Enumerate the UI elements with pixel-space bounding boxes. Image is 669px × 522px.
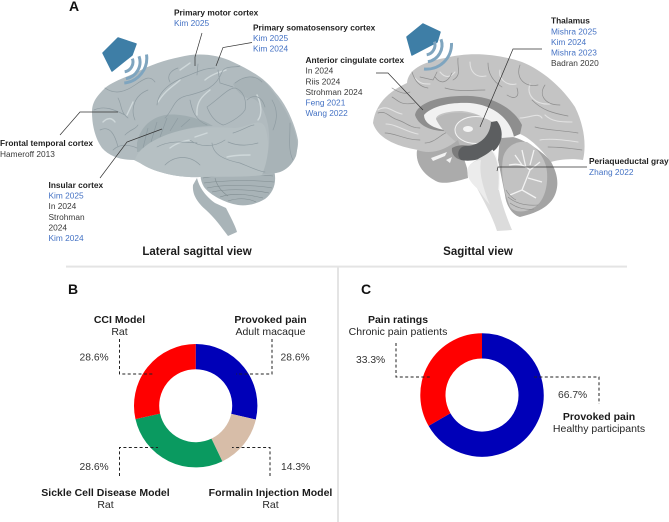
label: primary somatosensory cortex: Primary somatosensory cortex — [253, 22, 376, 32]
donut chart B — [147, 357, 245, 455]
dashed leader: pain ratings — [396, 343, 430, 377]
label: thalamus: Thalamus — [551, 16, 590, 26]
corpus callosum — [424, 103, 514, 138]
label: thalamus: Mishra 2023 — [551, 48, 597, 58]
brainstem — [467, 150, 512, 231]
value: CCI: 28.6% — [80, 352, 109, 364]
value: provoked pain: 66.7% — [558, 390, 587, 401]
label: primary motor cortex: Primary motor cortex — [174, 8, 259, 18]
label: sickle cell disease model: Sickle Cell Disease Model — [41, 487, 170, 499]
cerebrum — [373, 54, 585, 170]
label: thalamus: Badran 2020 — [551, 58, 599, 68]
temporal lobe — [135, 123, 268, 177]
label: thalamus: Kim 2024 — [551, 37, 587, 47]
label: anterior cingulate cortex: Riis 2024 — [306, 76, 341, 86]
folds — [378, 58, 582, 150]
panel C: human study donut — [349, 281, 645, 444]
basal forebrain lobe — [417, 140, 468, 183]
folds highlight — [378, 62, 578, 142]
dashed leader: provoked pain — [236, 339, 272, 374]
cerebellum white matter — [509, 150, 542, 198]
icon: ultrasound transducer, lateral — [103, 38, 147, 83]
interthalamic mass — [463, 126, 473, 132]
label: insular cortex: 2024 — [48, 222, 67, 232]
label: anterior cingulate cortex: Wang 2022 — [306, 108, 348, 118]
cingulate cortex — [415, 96, 522, 137]
label: insular cortex: In 2024 — [48, 201, 77, 211]
label: sickle cell disease model: Rat — [97, 499, 114, 511]
label: periaqueductal gray: Zhang 2022 — [589, 167, 634, 177]
brain illustration: sagittal view — [373, 54, 585, 231]
label: insular cortex: Insular cortex — [48, 180, 103, 190]
sulci — [94, 64, 293, 172]
label: anterior cingulate cortex: Feng 2021 — [306, 98, 346, 108]
thalamus — [455, 116, 497, 144]
label: insular cortex: Strohman — [48, 212, 85, 222]
label: provoked pain: Adult macaque — [235, 326, 306, 338]
label: anterior cingulate cortex: Anterior cingulate cortex — [306, 55, 404, 65]
slice: formalin injection 14.3% — [217, 417, 244, 450]
slice: sickle cell disease 28.6% — [148, 416, 217, 455]
label: formalin injection model: Formalin Injection Model — [209, 487, 332, 499]
fornix area — [436, 113, 499, 150]
cerebellum lobules — [502, 142, 547, 212]
label: insular cortex: Kim 2024 — [48, 233, 84, 243]
icon: ultrasound transducer, sagittal — [407, 24, 452, 69]
label: insular cortex: Kim 2025 — [48, 190, 84, 200]
value: formalin: 14.3% — [281, 462, 310, 473]
leader: periaqueductal gray — [497, 167, 587, 171]
brain illustration: lateral view — [92, 54, 298, 236]
donut chart C — [433, 346, 531, 444]
label: pain ratings: Chronic pain patients — [349, 326, 447, 338]
panel B: animal model donut — [41, 281, 332, 511]
white tract — [431, 152, 452, 163]
leader: anterior cingulate cortex — [376, 73, 423, 110]
dashed leader: CCI — [120, 339, 153, 374]
dashed leader: formalin — [232, 448, 270, 476]
highlights — [103, 63, 261, 157]
label: formalin injection model: Rat — [262, 499, 279, 511]
label: primary motor cortex: Kim 2025 — [174, 18, 210, 28]
insula folds — [143, 118, 190, 148]
value: provoked pain: 28.6% — [280, 352, 310, 364]
leader: frontal temporal cortex — [60, 112, 118, 135]
insular cortex — [137, 115, 213, 152]
label: frontal temporal cortex: Hameroff 2013 — [0, 149, 55, 159]
label: primary somatosensory cortex: Kim 2024 — [253, 44, 289, 54]
brainstem — [193, 178, 237, 236]
label: anterior cingulate cortex: Strohman 2024 — [306, 87, 363, 97]
brainstem outline — [492, 150, 499, 190]
label: CCI model: CCI Model — [94, 314, 145, 326]
label: frontal temporal cortex: Frontal temporal cortex — [0, 138, 93, 148]
cerebellum lower folds — [506, 190, 538, 209]
hippocampus — [458, 121, 502, 161]
dashed leader: provoked pain — [534, 377, 599, 404]
label: provoked pain: Healthy participants — [553, 423, 645, 435]
leader: primary motor cortex — [195, 33, 202, 66]
leader: thalamus — [480, 49, 542, 127]
heading: C: C — [361, 281, 371, 297]
caption: sagittal view: Sagittal view — [443, 246, 513, 258]
label: thalamus: Mishra 2025 — [551, 26, 597, 36]
label: CCI model: Rat — [111, 326, 128, 338]
cerebrum — [92, 54, 298, 177]
value: sickle cell: 28.6% — [80, 462, 109, 473]
value: pain ratings: 33.3% — [356, 355, 385, 366]
heading: B: B — [68, 281, 78, 297]
label: anterior cingulate cortex: In 2024 — [306, 66, 334, 76]
rear darker region — [233, 76, 297, 175]
cerebellum backdrop — [498, 135, 557, 217]
brainstem highlight — [467, 160, 490, 205]
label: periaqueductal gray: Periaqueductal gray — [589, 156, 669, 166]
leader: primary somatosensory cortex — [216, 42, 252, 66]
slice: CCI 28.6% — [147, 357, 196, 416]
cerebellum folds — [203, 171, 274, 202]
medial limbic structure — [452, 145, 478, 160]
label: primary somatosensory cortex: Kim 2025 — [253, 33, 289, 43]
slice: provoked pain 28.6% — [196, 357, 245, 417]
slice: provoked pain 66.7% — [439, 346, 531, 444]
caption: lateral sagittal view: Lateral sagittal view — [142, 246, 252, 258]
leader: insular cortex — [100, 129, 162, 178]
cerebellum — [201, 170, 275, 205]
slice: pain ratings 33.3% — [433, 346, 482, 420]
label: pain ratings: Pain ratings — [368, 314, 428, 326]
label: provoked pain: Provoked pain — [563, 411, 635, 423]
dashed leader: sickle cell — [120, 448, 158, 476]
label: provoked pain: Provoked pain — [234, 314, 307, 326]
panel A: brain views — [0, 0, 669, 258]
